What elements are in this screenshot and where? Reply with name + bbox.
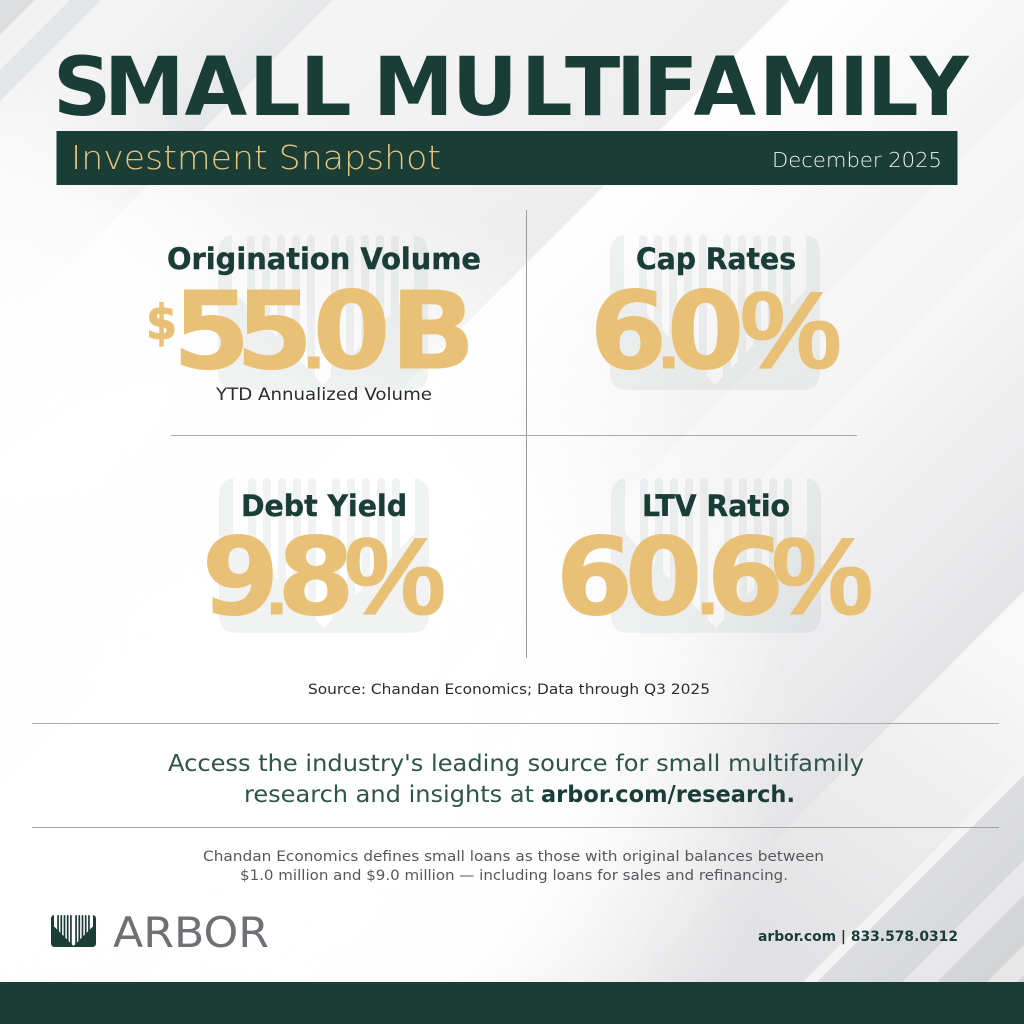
value: B (391, 269, 475, 393)
value: 6 (590, 269, 667, 393)
source note: Source: Chandan Economics; Data through Q3 2025 (308, 682, 710, 698)
panel: debt yield (202, 478, 446, 639)
banner heading: Investment Snapshot (71, 138, 441, 177)
value: . (696, 560, 719, 628)
contact details: arbor.com | 833.578.0312 (758, 929, 958, 945)
caption: YTD Annualized Volume (215, 385, 432, 404)
panel: origination volume (146, 235, 481, 404)
subtitle banner (56, 131, 958, 185)
panel: cap rates (590, 235, 842, 393)
value: % (740, 268, 842, 392)
banner date: December 2025 (772, 148, 942, 172)
call to action: Access the industry's leading source for small multifamily (168, 749, 864, 777)
icon: arbor mark (51, 915, 96, 947)
value: 0 (313, 269, 390, 393)
value: . (657, 314, 680, 382)
wordmark: ARBOR (113, 908, 269, 957)
title: SMALL MULTIFAMILY (53, 41, 970, 135)
icon: ghost logo (611, 478, 821, 633)
heading: LTV Ratio (642, 489, 790, 523)
arbor logo (51, 908, 269, 957)
heading: Cap Rates (636, 242, 796, 276)
value: 6 (707, 515, 784, 639)
footer bar (0, 982, 1024, 1024)
heading: Debt Yield (241, 489, 407, 523)
value: 5 (236, 269, 313, 393)
call to action (168, 749, 864, 808)
icon: ghost logo (218, 235, 428, 390)
value: 9 (202, 515, 279, 639)
value: % (344, 514, 446, 638)
value: . (265, 560, 288, 628)
icon: ghost logo (219, 478, 429, 633)
value: % (772, 514, 873, 638)
value: 0 (667, 269, 744, 393)
value: . (302, 314, 325, 382)
definition note: $1.0 million and $9.0 million — including loans for sales and refinancing. (240, 868, 788, 884)
quadrant dividers (171, 210, 857, 658)
value: 5 (173, 269, 250, 393)
value: 6 (556, 515, 633, 639)
heading: Origination Volume (167, 242, 481, 276)
call to action: arbor.com/research. (541, 780, 795, 808)
rules (32, 723, 999, 828)
value: 0 (625, 515, 702, 639)
definition note: Chandan Economics defines small loans as those with original balances between (203, 849, 824, 865)
icon: ghost logo (610, 235, 820, 390)
value: 8 (277, 515, 355, 639)
panel: ltv ratio (556, 478, 873, 639)
dollar sign: $ (146, 295, 177, 351)
call to action: research and insights at (244, 780, 534, 808)
definition note (203, 849, 824, 884)
